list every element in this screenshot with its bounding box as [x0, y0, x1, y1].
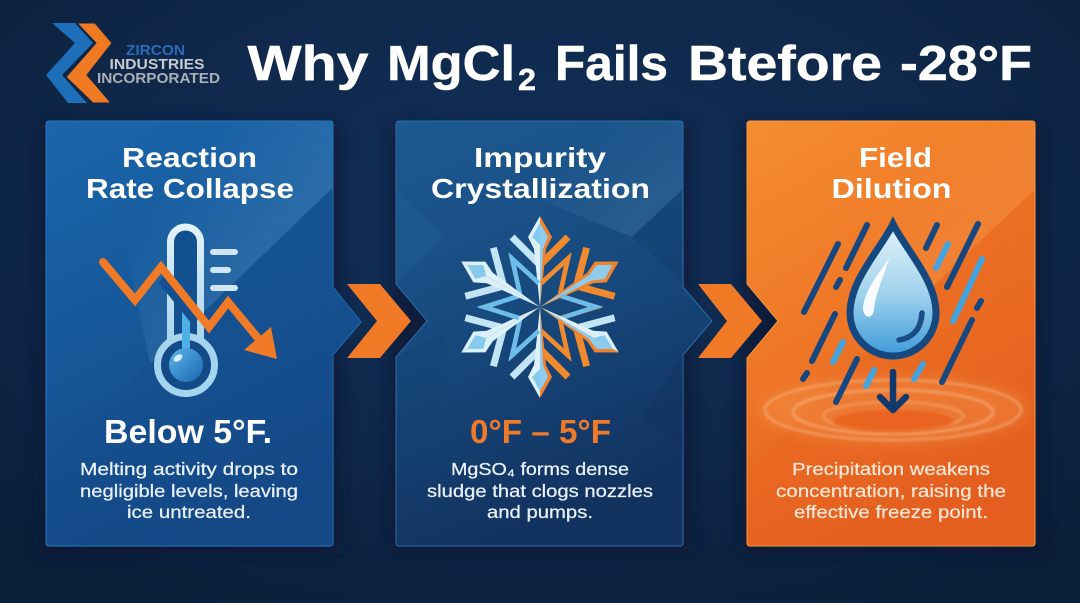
snowflake arm upper left [447, 237, 554, 331]
drop highlight [863, 258, 889, 317]
panel 2 heading [431, 142, 650, 204]
panel 1 card [46, 121, 361, 546]
panel: reaction rate collapse [46, 121, 361, 546]
panel 2 body [427, 459, 653, 522]
icon: water drop with rain [803, 224, 982, 410]
drop lower reflection [899, 313, 922, 340]
panel 3 heading: Dilution [832, 173, 952, 204]
logo wordmark [97, 42, 220, 87]
title: Why [248, 37, 368, 91]
logo wordmark: INCORPORATED [97, 70, 220, 87]
panel 3 card [747, 121, 1035, 546]
down arrow [880, 372, 906, 410]
panel: impurity crystallization [396, 121, 712, 546]
arrow: first chevron [347, 284, 411, 358]
title: Fails [555, 37, 668, 91]
snowflake arm lower left [447, 283, 554, 377]
panel 1 key value: Below 5°F. [104, 413, 272, 450]
panel 2 body: and pumps. [487, 502, 593, 522]
panel: field dilution [747, 121, 1035, 546]
arrow: second chevron [698, 284, 762, 358]
logo wordmark: ZIRCON [126, 42, 185, 59]
panel 3 heading [832, 142, 952, 204]
drop [850, 224, 936, 356]
panel 3 body: Precipitation weakens [792, 459, 990, 479]
panel 3 heading: Field [859, 142, 932, 173]
title: 2 [518, 62, 536, 97]
icon: thermometer with falling arrow [103, 227, 277, 394]
rain streaks light [833, 244, 982, 386]
panel 2 body: sludge that clogs nozzles [427, 481, 653, 501]
panel 1 body: negligible levels, leaving [80, 481, 298, 501]
panel 1 heading [86, 142, 294, 204]
panel 1 body: Melting activity drops to [80, 459, 298, 479]
title [248, 37, 1032, 97]
snowflake arm lower right [526, 283, 633, 377]
water ripples [758, 376, 1028, 444]
title: -28°F [900, 37, 1032, 91]
snowflake arm bottom [512, 307, 568, 398]
title: Btefore [688, 37, 882, 91]
logo [46, 23, 220, 103]
panel 1 body: ice untreated. [127, 502, 251, 522]
panel 2 heading: Crystallization [431, 173, 650, 204]
rain streaks dark [803, 224, 981, 402]
icon: snowflake [447, 216, 633, 398]
logo wordmark: INDUSTRIES [110, 56, 204, 73]
panel 1 heading: Rate Collapse [86, 173, 294, 204]
panel 1 heading: Reaction [122, 142, 257, 173]
title: MgCl [387, 37, 515, 91]
panel 3 body: effective freeze point. [794, 502, 988, 522]
panel 2 card [396, 121, 712, 546]
snowflake arm upper right [526, 237, 633, 331]
panel 2 heading: Impurity [474, 142, 606, 173]
panel 3 body [776, 459, 1006, 522]
panel 2 key value: 0°F – 5°F [470, 413, 611, 450]
panel 2 body: MgSO₄ forms dense [451, 459, 629, 479]
panel 3 body: concentration, raising the [776, 481, 1006, 501]
panel 1 body [80, 459, 298, 522]
icon: logo chevrons [46, 23, 112, 103]
snowflake arm top [512, 216, 568, 307]
